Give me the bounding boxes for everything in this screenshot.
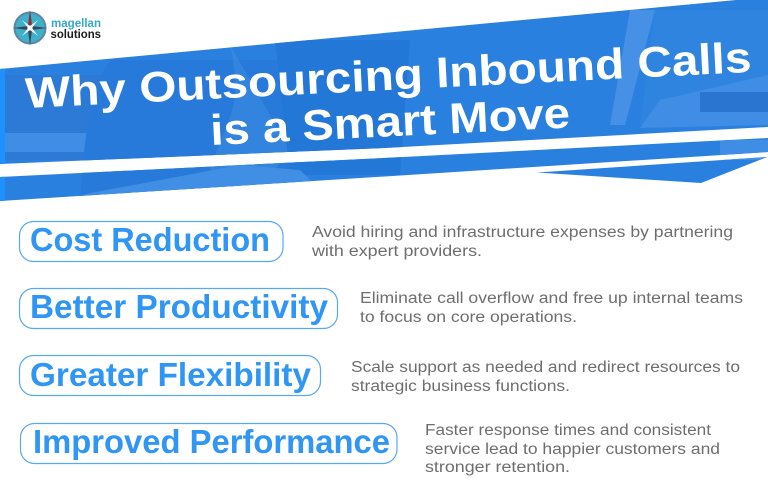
description: stronger retention. bbox=[425, 459, 570, 476]
item: better productivity bbox=[20, 288, 743, 328]
item: cost reduction bbox=[20, 221, 733, 262]
banner bbox=[0, 0, 768, 205]
logo wordmark bbox=[50, 16, 101, 41]
description bbox=[425, 422, 720, 476]
description: Eliminate call overflow and free up internal teams bbox=[360, 290, 743, 307]
logo bbox=[13, 10, 101, 46]
item: greater flexibility bbox=[20, 356, 740, 396]
description: Avoid hiring and infrastructure expenses by partnering bbox=[312, 224, 733, 241]
logo wordmark: solutions bbox=[50, 27, 101, 41]
title: Why Outsourcing Inbound Calls bbox=[24, 34, 753, 118]
pill heading: Improved Performance bbox=[33, 423, 390, 460]
description: Faster response times and consistent bbox=[425, 422, 712, 439]
description bbox=[360, 290, 743, 326]
description: strategic business functions. bbox=[351, 378, 570, 395]
description bbox=[351, 359, 740, 395]
pill heading: Cost Reduction bbox=[30, 221, 270, 258]
logo wordmark: magellan bbox=[51, 16, 101, 30]
description bbox=[311, 224, 733, 260]
description: service lead to happier customers and bbox=[425, 441, 720, 458]
description: Scale support as needed and redirect resources to bbox=[351, 359, 740, 376]
icon: compass bbox=[13, 10, 47, 46]
pill heading: Better Productivity bbox=[30, 288, 329, 325]
banner background with tinted office photo bbox=[0, 0, 768, 205]
description: with expert providers. bbox=[311, 243, 482, 260]
title bbox=[24, 34, 753, 155]
title: is a Smart Move bbox=[209, 89, 571, 155]
item: improved performance bbox=[20, 422, 720, 476]
pill heading: Greater Flexibility bbox=[30, 356, 312, 393]
description: to focus on core operations. bbox=[360, 309, 577, 326]
